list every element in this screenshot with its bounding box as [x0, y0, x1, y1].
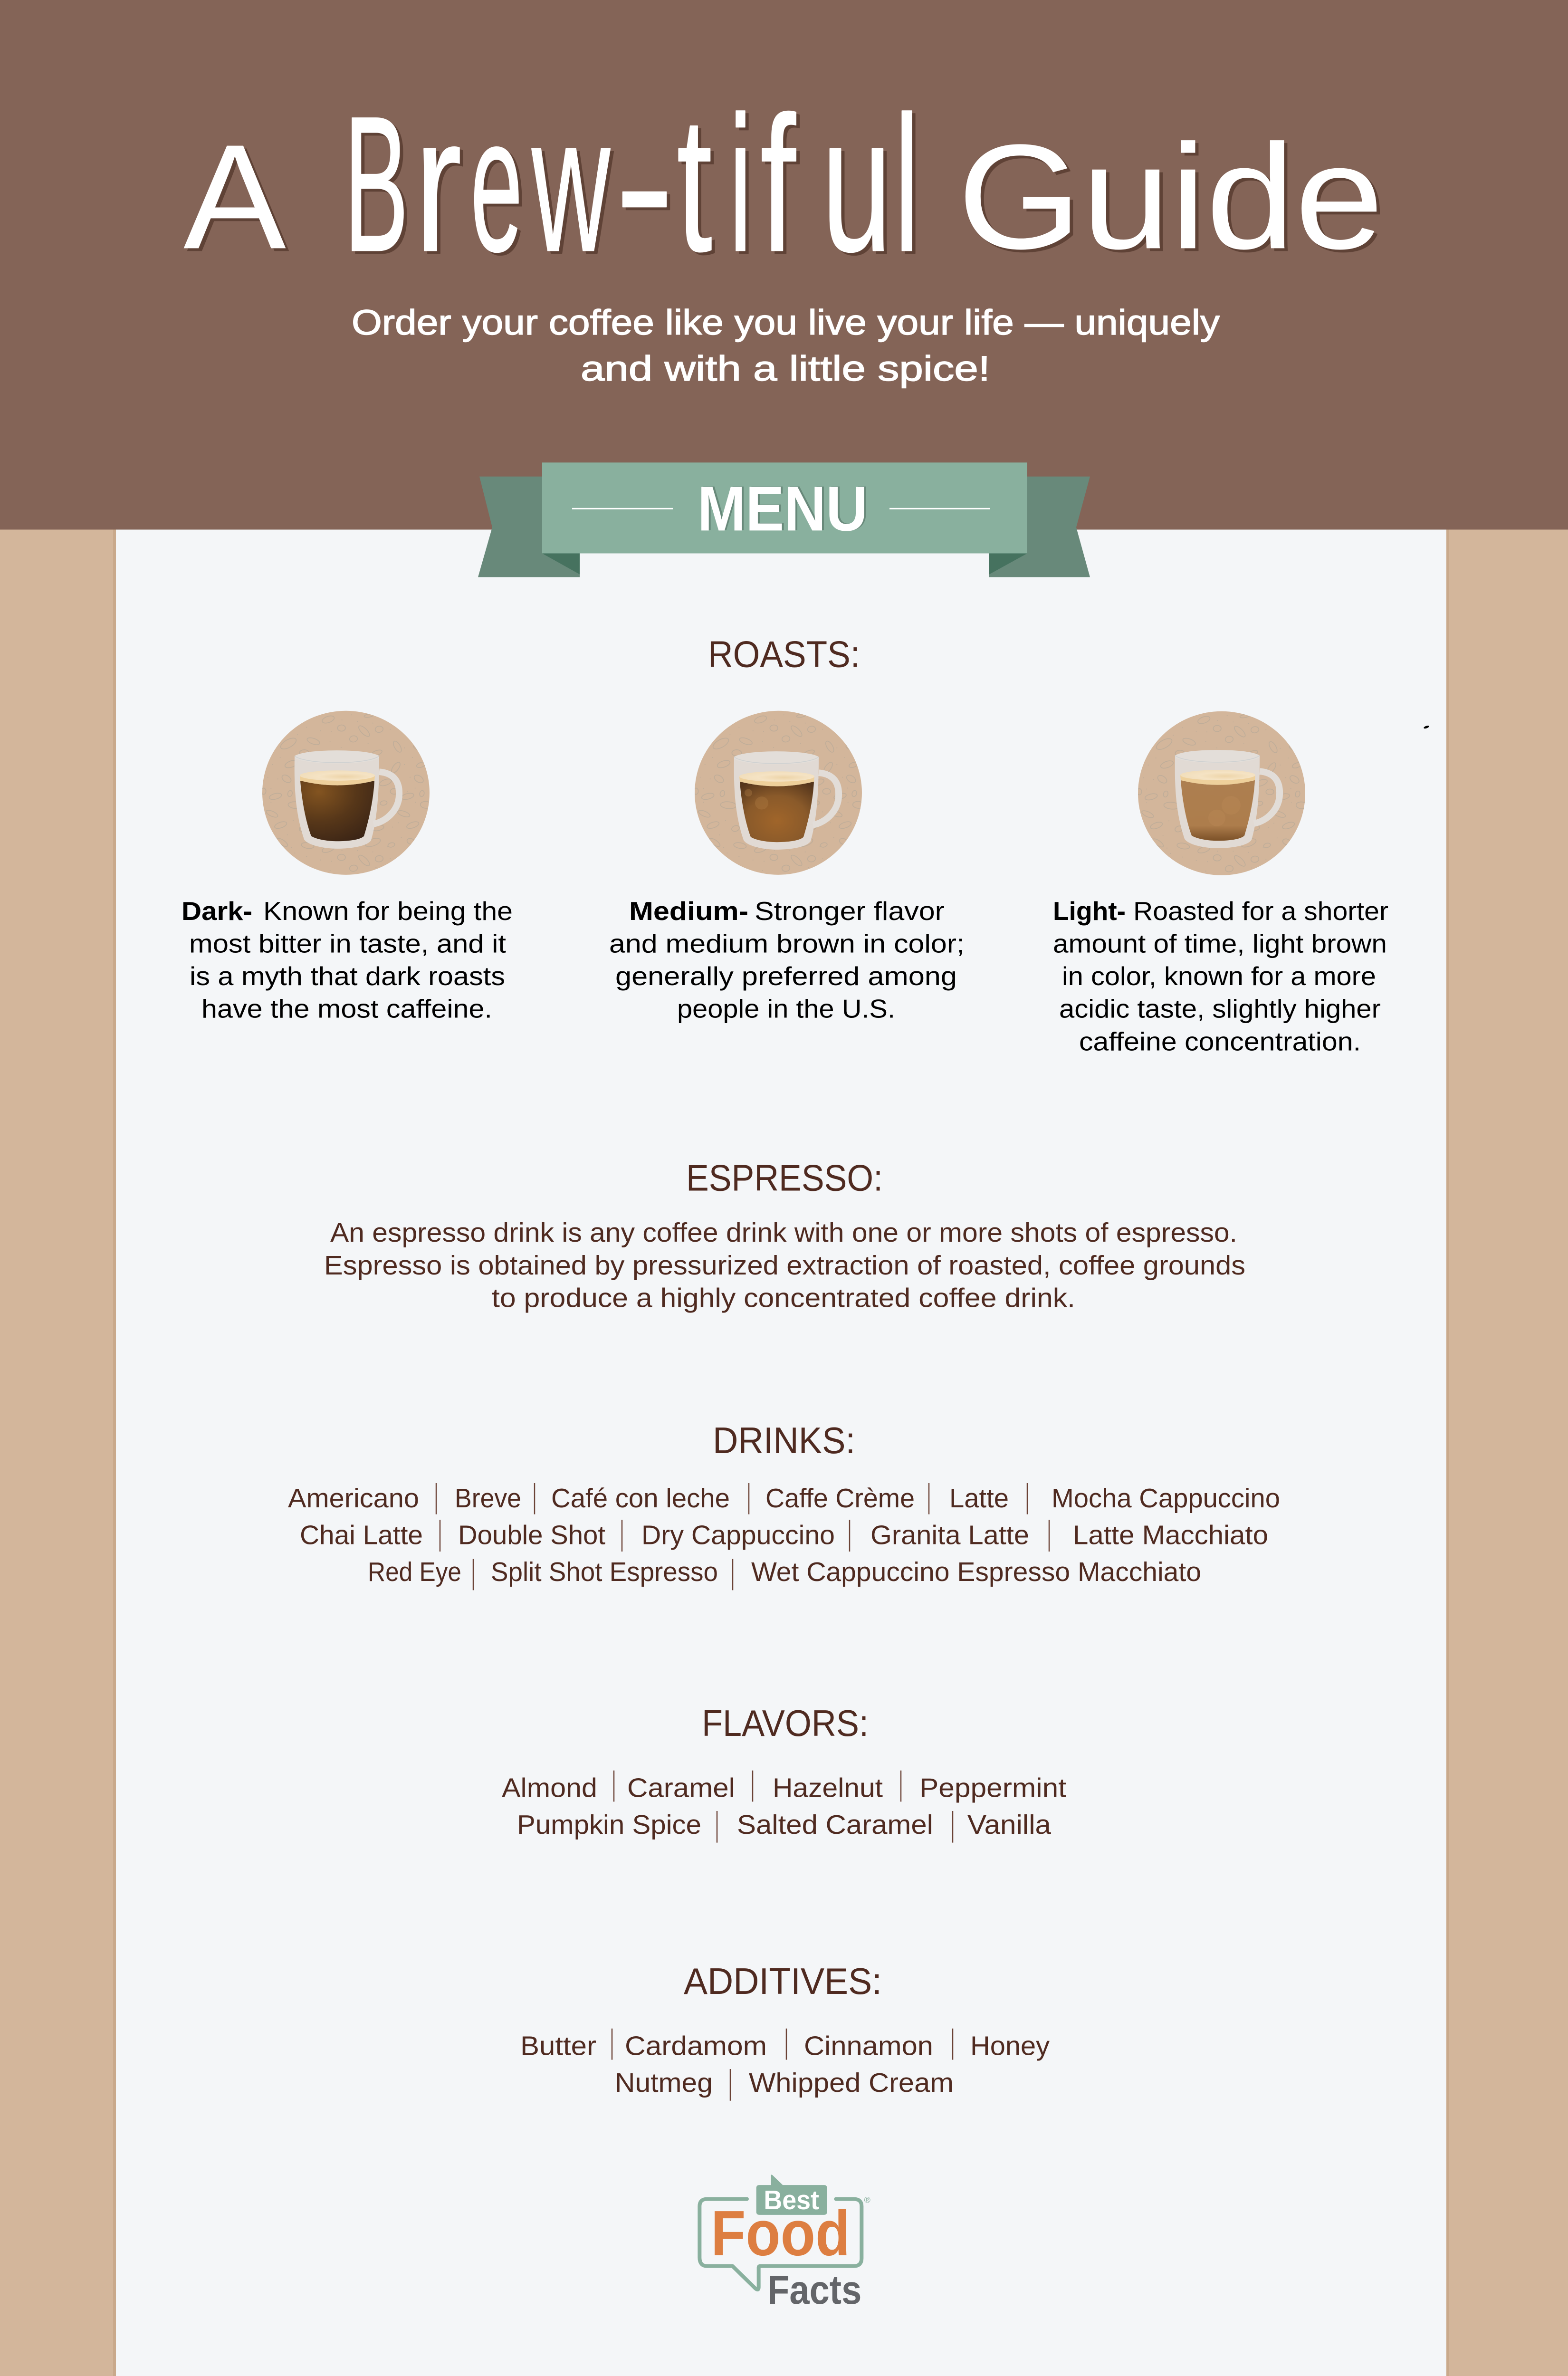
title word: Brew-tiful: - — [615, 76, 674, 291]
list: flavors: Vanilla — [967, 1810, 1051, 1840]
list: drinks: Caffe Crème — [765, 1483, 915, 1514]
text: light roast: in color, known for a more — [1062, 962, 1376, 991]
text: dark roast: is a myth that dark roasts — [190, 962, 505, 991]
ribbon left tail — [478, 477, 580, 577]
logo Best tag — [756, 2175, 827, 2215]
title word: Brew-tiful: f — [760, 76, 796, 291]
heading: flavors: FLAVORS: — [702, 1702, 869, 1744]
title word: Brew-tiful: B — [344, 76, 409, 291]
list: flavors: Salted Caramel — [737, 1810, 933, 1840]
text: light roast: caffeine concentration. — [1079, 1027, 1361, 1056]
header band — [0, 0, 1568, 529]
text: light roast: acidic taste, slightly higher — [1059, 994, 1381, 1024]
list: flavors: Pumpkin Spice — [517, 1810, 701, 1840]
heading: drinks: DRINKS: — [713, 1419, 855, 1461]
list: drinks: Latte Macchiato — [1073, 1520, 1268, 1550]
text: medium roast: generally preferred among — [615, 962, 957, 991]
ribbon label: MENU: MENU — [698, 473, 868, 544]
title word: Brew-tiful: l — [894, 76, 919, 291]
text: medium roast: people in the U.S. — [677, 994, 895, 1024]
list: drinks — [288, 1483, 1280, 1590]
list: drinks: Red Eye — [368, 1557, 461, 1587]
heading: additives: ADDITIVES: — [684, 1960, 882, 2002]
title — [183, 76, 1384, 291]
list: drinks: Wet Cappuccino Espresso Macchiato — [751, 1557, 1201, 1587]
heading: espresso: ESPRESSO: — [686, 1157, 883, 1198]
text: dark roast: Dark- — [182, 896, 252, 926]
list: additives: Whipped Cream — [749, 2068, 954, 2098]
text: dark roast: Known for being the — [263, 896, 513, 926]
title word: Brew-tiful: u — [822, 76, 892, 291]
list: flavors: Hazelnut — [773, 1773, 883, 1803]
list: drinks: Americano — [288, 1483, 419, 1514]
ribbon rules — [572, 508, 990, 509]
stray mark — [1424, 725, 1429, 729]
title word: Brew-tiful: t — [677, 76, 713, 291]
list: drinks: Latte — [949, 1483, 1009, 1514]
subtitle — [352, 302, 1220, 388]
list: flavors: Almond — [502, 1773, 597, 1803]
menu panel — [113, 529, 1449, 2376]
title word: Brew-tiful: e — [470, 76, 523, 291]
logo: Best Food Facts — [699, 2175, 870, 2313]
logo word: Facts: Facts — [767, 2268, 861, 2313]
list: additives — [520, 2029, 1050, 2101]
logo word: Food: Food — [711, 2197, 850, 2269]
subtitle: and with a little spice! — [581, 349, 990, 388]
icon: light roast mug — [1137, 711, 1308, 875]
text: dark roast: most bitter in taste, and it — [189, 929, 506, 958]
icon: dark roast mug — [261, 711, 432, 875]
text: light roast — [1053, 896, 1388, 1056]
text: light roast: amount of time, light brown — [1053, 929, 1387, 958]
subtitle: Order your coffee like you live your life — uniquely — [352, 302, 1220, 342]
text: espresso description: An espresso drink is any coffee drink with one or more shots of espresso. — [330, 1218, 1237, 1248]
logo speech bubble — [699, 2199, 861, 2290]
icon: medium roast mug — [694, 711, 864, 875]
list: additives: Cardamom — [625, 2031, 767, 2061]
list: drinks: Mocha Cappuccino — [1052, 1483, 1280, 1514]
text: dark roast: have the most caffeine. — [201, 994, 492, 1024]
menu ribbon — [478, 462, 1090, 577]
list: flavors — [502, 1771, 1066, 1843]
list: flavors: Caramel — [627, 1773, 735, 1803]
text: dark roast — [182, 896, 513, 1024]
text: espresso description — [324, 1218, 1245, 1313]
ribbon folds — [542, 553, 1027, 575]
text: medium roast: Stronger flavor — [755, 896, 945, 926]
list: drinks: Granita Latte — [870, 1520, 1029, 1550]
list: drinks: Dry Cappuccino — [641, 1520, 835, 1550]
list: drinks: Breve — [455, 1483, 521, 1514]
title word: Brew-tiful: w — [530, 76, 612, 291]
text: espresso description: Espresso is obtained by pressurized extraction of roasted, coffee grounds — [324, 1250, 1245, 1281]
list: drinks: Split Shot Espresso — [491, 1557, 718, 1587]
text: medium roast: and medium brown in color; — [609, 929, 965, 958]
title word: Brew-tiful: r — [414, 76, 462, 291]
list: drinks: Café con leche — [551, 1483, 730, 1514]
heading: roasts: ROASTS: — [708, 633, 860, 675]
ribbon right tail — [989, 477, 1090, 577]
title word: Guide: Guide — [957, 114, 1384, 280]
logo registered mark: ® — [864, 2195, 870, 2205]
title word: Brew-tiful: i — [729, 76, 752, 291]
text: espresso description: to produce a highly concentrated coffee drink. — [492, 1283, 1075, 1313]
text: medium roast — [609, 896, 965, 1024]
text: light roast: Roasted for a shorter — [1133, 896, 1388, 926]
ribbon front — [542, 462, 1027, 553]
logo word: Best: Best — [764, 2185, 819, 2215]
list: additives: Honey — [970, 2031, 1050, 2061]
list: additives: Nutmeg — [615, 2068, 713, 2098]
text: medium roast: Medium- — [629, 896, 748, 926]
list: drinks: Chai Latte — [300, 1520, 423, 1550]
text: light roast: Light- — [1053, 896, 1126, 926]
title word: A: A — [183, 114, 287, 280]
list: flavors: Peppermint — [919, 1773, 1066, 1803]
list: drinks: Double Shot — [458, 1520, 605, 1550]
list: additives: Cinnamon — [804, 2031, 933, 2061]
list: additives: Butter — [520, 2031, 596, 2061]
